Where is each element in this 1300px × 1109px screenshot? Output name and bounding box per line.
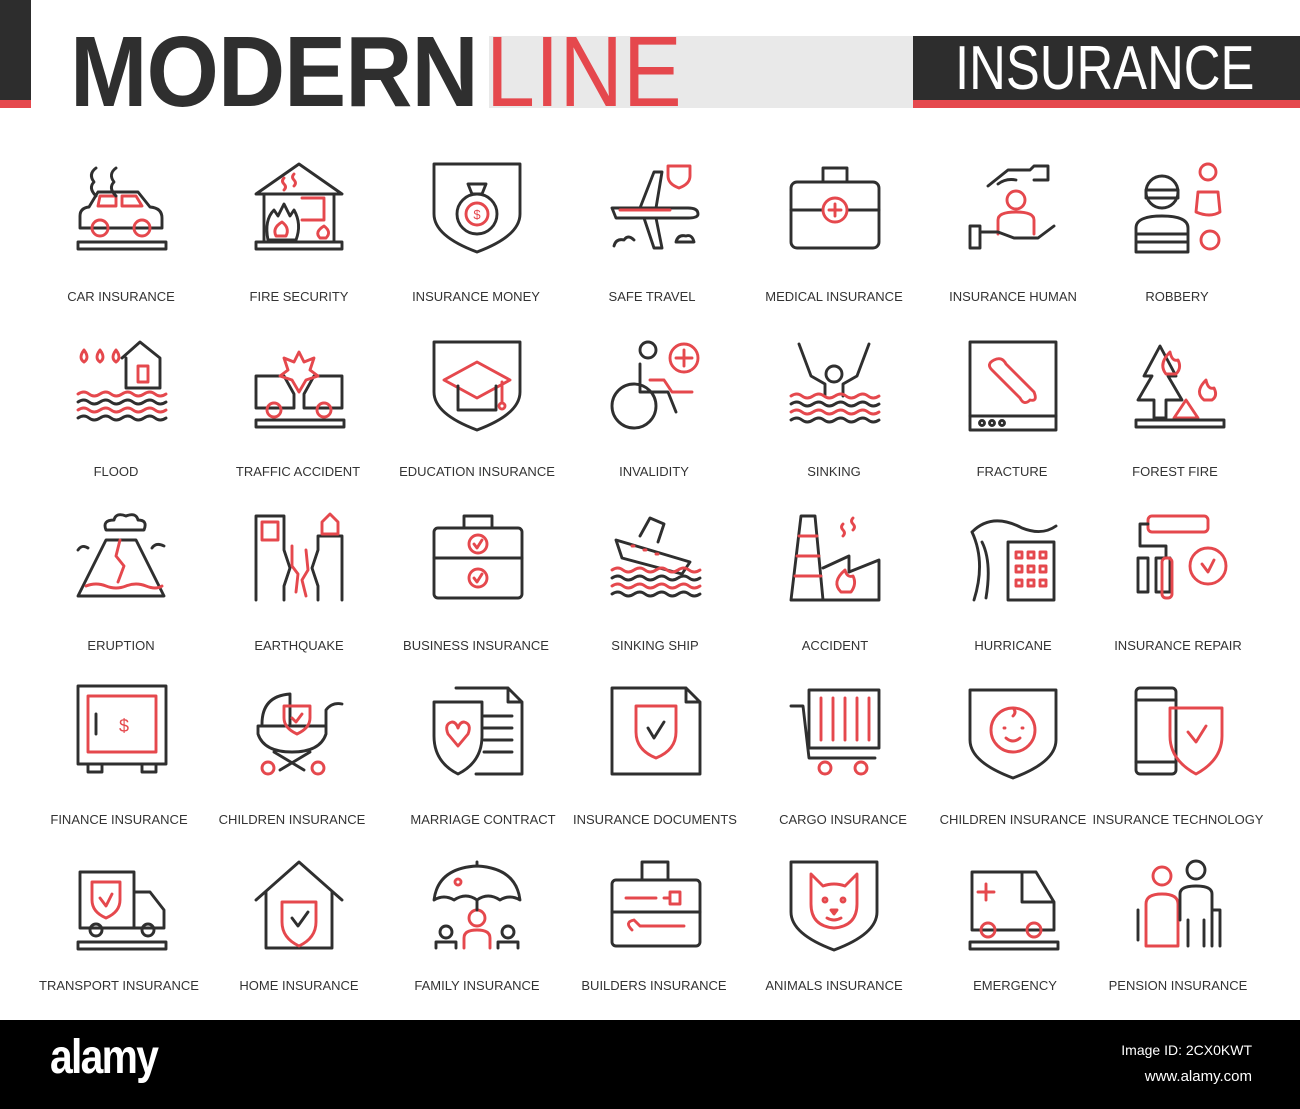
cell: animals insurance xyxy=(765,862,903,993)
cell: insurance human: INSURANCE HUMAN xyxy=(949,289,1077,304)
cell: finance insurance: $ xyxy=(119,716,129,736)
cell: sinking xyxy=(791,344,879,479)
cell: traffic accident xyxy=(236,352,360,479)
cell: insurance technology xyxy=(1093,688,1264,827)
cell: marriage contract: MARRIAGE CONTRACT xyxy=(410,812,556,827)
cell: family insurance xyxy=(414,862,540,993)
cell: sinking: SINKING xyxy=(807,464,861,479)
title: MODERN: MODERN xyxy=(70,16,478,128)
footer url: www.alamy.com xyxy=(1145,1068,1252,1085)
cell: children insurance stroller xyxy=(219,694,366,827)
cell: sinking ship xyxy=(611,518,700,653)
cell: business insurance xyxy=(403,516,549,653)
cell: pension insurance xyxy=(1109,861,1248,993)
cell: forest fire xyxy=(1132,346,1224,479)
title: LINE: LINE xyxy=(486,16,682,128)
cell: accident xyxy=(791,516,879,653)
cell: traffic accident: TRAFFIC ACCIDENT xyxy=(236,464,360,479)
cell: fire security: FIRE SECURITY xyxy=(250,289,349,304)
cell: business insurance: BUSINESS INSURANCE xyxy=(403,638,549,653)
footer bar xyxy=(0,1020,1300,1109)
cell: medical insurance xyxy=(765,168,903,304)
cell: car insurance xyxy=(67,168,175,304)
cell: finance insurance: FINANCE INSURANCE xyxy=(50,812,188,827)
cell: earthquake xyxy=(254,514,344,653)
cell: car insurance: CAR INSURANCE xyxy=(67,289,175,304)
cell: insurance repair: INSURANCE REPAIR xyxy=(1114,638,1242,653)
cell: emergency: EMERGENCY xyxy=(973,978,1057,993)
cell: eruption xyxy=(78,515,164,653)
cell: builders insurance: BUILDERS INSURANCE xyxy=(581,978,727,993)
cell: flood xyxy=(78,342,166,479)
cell: forest fire: FOREST FIRE xyxy=(1132,464,1218,479)
cell: marriage contract xyxy=(410,688,556,827)
cell: hurricane: HURRICANE xyxy=(974,638,1052,653)
cell: cargo insurance xyxy=(779,690,907,827)
cell: children insurance shield xyxy=(940,690,1087,827)
cell: children insurance shield: CHILDREN INSURANCE xyxy=(940,812,1087,827)
cell: fracture: FRACTURE xyxy=(977,464,1048,479)
cell: accident: ACCIDENT xyxy=(802,638,868,653)
cell: sinking ship: SINKING SHIP xyxy=(611,638,699,653)
cell: earthquake: EARTHQUAKE xyxy=(254,638,344,653)
cell: insurance documents xyxy=(573,688,737,827)
cell: eruption: ERUPTION xyxy=(87,638,155,653)
cell: transport insurance xyxy=(39,872,199,993)
cell: finance insurance xyxy=(50,686,188,827)
cell: insurance money: INSURANCE MONEY xyxy=(412,289,540,304)
cell: home insurance xyxy=(239,862,359,993)
cell: transport insurance: TRANSPORT INSURANCE xyxy=(39,978,199,993)
cell: insurance money xyxy=(412,164,540,304)
cell: robbery xyxy=(1136,164,1220,304)
cell: insurance repair xyxy=(1114,516,1242,653)
cell: safe travel xyxy=(609,166,698,304)
cell: builders insurance xyxy=(581,862,727,993)
cell: pension insurance: PENSION INSURANCE xyxy=(1109,978,1248,993)
cell: invalidity xyxy=(612,342,698,479)
cell: cargo insurance: CARGO INSURANCE xyxy=(779,812,907,827)
cell: robbery: ROBBERY xyxy=(1145,289,1209,304)
cell: hurricane xyxy=(972,521,1056,653)
header grey band xyxy=(489,36,913,108)
footer logo: alamy: alamy xyxy=(50,1031,157,1084)
cell: invalidity: INVALIDITY xyxy=(619,464,689,479)
cell: insurance technology: INSURANCE TECHNOLOGY xyxy=(1093,812,1264,827)
cell: fire security xyxy=(250,164,349,304)
cell: insurance documents: INSURANCE DOCUMENTS xyxy=(573,812,737,827)
cell: education insurance xyxy=(399,342,555,479)
cell: family insurance: FAMILY INSURANCE xyxy=(414,978,540,993)
header box: INSURANCE: INSURANCE xyxy=(955,34,1254,103)
cell: emergency xyxy=(970,872,1058,993)
cell: fracture xyxy=(970,342,1056,479)
cell: education insurance: EDUCATION INSURANCE xyxy=(399,464,555,479)
cell: safe travel: SAFE TRAVEL xyxy=(609,289,695,304)
cell: animals insurance: ANIMALS INSURANCE xyxy=(765,978,903,993)
cell: children insurance stroller: CHILDREN INSURANCE xyxy=(219,812,366,827)
cell: insurance human xyxy=(949,166,1077,304)
cell: flood: FLOOD xyxy=(94,464,138,479)
cell: insurance money: $ xyxy=(473,207,481,222)
cell: home insurance: HOME INSURANCE xyxy=(239,978,359,993)
footer image id: Image ID: 2CX0KWT xyxy=(1121,1042,1252,1058)
cell: medical insurance: MEDICAL INSURANCE xyxy=(765,289,903,304)
header left black bar xyxy=(0,0,31,108)
